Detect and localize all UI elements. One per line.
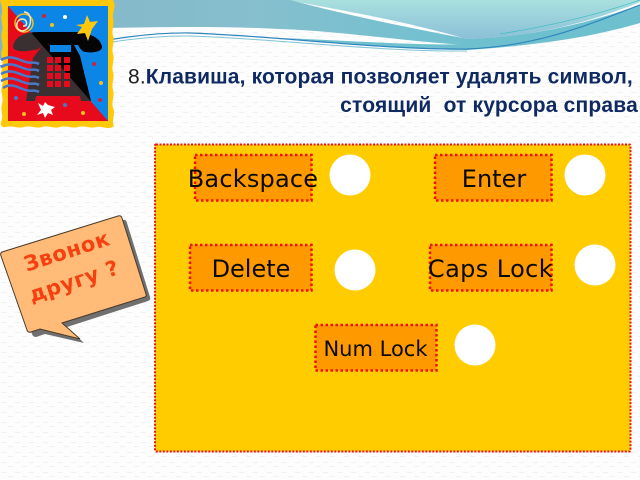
marker: Caps Lock	[574, 244, 616, 286]
panel background	[155, 144, 630, 452]
stamp scalloped border	[0, 0, 115, 128]
marker: Backspace	[330, 154, 370, 196]
option: Caps Lock	[428, 245, 553, 290]
option: Enter	[435, 155, 552, 200]
confetti dots	[14, 14, 103, 116]
option: Caps Lock: Caps Lock	[428, 255, 553, 283]
spiral	[15, 12, 33, 32]
top wave decoration	[0, 0, 640, 68]
option: Enter: Enter	[462, 165, 526, 193]
stamp red field	[8, 6, 108, 121]
telephone keypad	[47, 57, 70, 87]
option: Backspace	[188, 155, 318, 200]
white star	[37, 102, 55, 118]
question line 1: 8.Клавиша, которая позволяет удалять символ,	[128, 66, 633, 88]
callout shadow	[4, 220, 150, 343]
option: Num Lock	[316, 325, 436, 370]
callout bubble	[1, 216, 146, 339]
option: Num Lock: Num Lock	[323, 337, 428, 361]
telephone display	[50, 45, 71, 52]
marker: Num Lock	[454, 324, 496, 366]
telephone silhouette grey side	[13, 32, 102, 101]
icon: telephone postage stamp	[0, 0, 115, 128]
callout text: другу ?	[26, 256, 122, 307]
option: Delete	[190, 245, 312, 290]
telephone silhouette black side	[31, 32, 102, 101]
marker: Enter	[564, 154, 606, 196]
question heading	[128, 66, 638, 117]
question line 2: стоящий от курсора справа	[340, 94, 638, 117]
callout text	[21, 226, 122, 307]
callout text: Звонок	[21, 226, 113, 276]
option: Backspace: Backspace	[188, 165, 318, 193]
marker: Delete	[334, 250, 376, 290]
stamp blue field	[8, 6, 108, 121]
option: Delete: Delete	[212, 255, 290, 283]
yellow star	[76, 15, 98, 41]
panel: answer options	[155, 144, 630, 452]
blue wavy lines	[1, 57, 39, 92]
callout: Звонок другу	[1, 216, 150, 343]
